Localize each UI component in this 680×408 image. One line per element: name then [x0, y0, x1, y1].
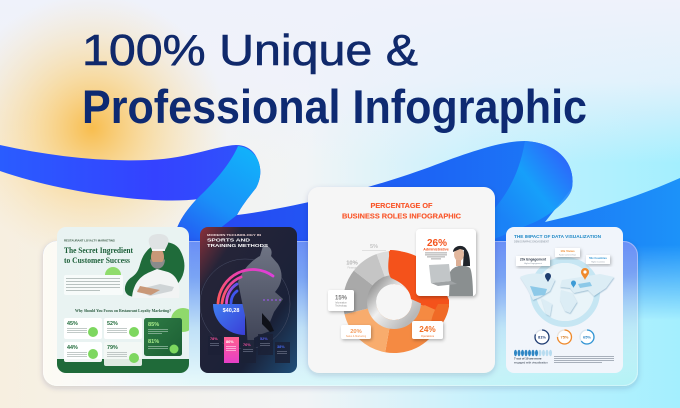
- stat: 45%: 45%: [67, 321, 78, 327]
- kicker: MODERN TECHNOLOGY IN: [207, 233, 261, 237]
- callout: engagement: [516, 256, 550, 266]
- glass panel: [43, 241, 638, 386]
- heading: [64, 246, 133, 265]
- label: 24%: 24%: [419, 325, 436, 334]
- map pin orange: [581, 268, 589, 280]
- donut: 65%: 65%: [583, 334, 591, 340]
- pie value: $40,28: [223, 308, 239, 314]
- stat card: 76%: [243, 343, 251, 347]
- label: 15%: 15%: [335, 296, 348, 302]
- people caption: engaged with visualization: [514, 360, 548, 364]
- callout: countries: 50x Countries: [589, 256, 607, 260]
- stat: 52%: [104, 318, 142, 339]
- title line 1: 100% Unique &: [82, 26, 418, 75]
- callout: views: [555, 248, 580, 257]
- stat card: 52%: [260, 337, 268, 341]
- heading: to Customer Success: [64, 256, 130, 265]
- label: 24%: Operations: [421, 334, 435, 338]
- callout: engagement: Higher Engagement: [524, 262, 542, 265]
- heading: PERCENTAGE OF: [370, 201, 433, 210]
- people icon row: [514, 350, 552, 356]
- athlete shoe: [262, 313, 274, 332]
- stat: 79%: 79%: [107, 345, 118, 351]
- callout: countries: Higher Countries: [591, 260, 605, 264]
- chef blob: [125, 242, 184, 298]
- stat: 52%: 52%: [107, 321, 118, 327]
- donut: 65%: [580, 330, 594, 344]
- outer circle line: [200, 259, 290, 349]
- donut: 75%: 75%: [560, 334, 569, 340]
- label: 15%: Information: [335, 302, 347, 304]
- label: 10%: Finance: [348, 266, 357, 270]
- light green circle: [105, 267, 121, 275]
- map pin navy: [545, 273, 551, 282]
- green circle accent: [171, 308, 189, 332]
- heading: SPORTS AND: [207, 238, 250, 242]
- label: 20%: [341, 325, 371, 339]
- callout: 26% administrative: [416, 229, 476, 296]
- raised orange slice: [388, 250, 449, 311]
- stat: 44%: 44%: [67, 345, 78, 351]
- quarter pie: [213, 304, 245, 335]
- callout: 26% administrative: 26%: [427, 238, 447, 249]
- subheading: Why Should You Focus on Restaurant Loyalty Marketing?: [75, 308, 171, 313]
- stat: 85% and 81% dark panel: 85%: [148, 322, 159, 328]
- label: 20%: 20%: [350, 329, 362, 335]
- label: 10%: 10%: [346, 260, 358, 266]
- purple dots: [263, 299, 281, 301]
- donut: 81%: [535, 330, 549, 344]
- label: 5%: [362, 244, 386, 251]
- subheading: DEMOGRAPHIC ENGAGEMENT: [514, 240, 549, 244]
- callout: 26% administrative: Administrative: [423, 248, 449, 252]
- stat card: 78%: [210, 337, 218, 341]
- intro text box: [64, 275, 123, 295]
- athlete figure: [238, 246, 283, 340]
- world map: [520, 260, 614, 324]
- heading: [207, 238, 268, 248]
- panel: restaurant loyalty infographic: [57, 227, 195, 373]
- donut: 75%: [558, 330, 572, 344]
- inner shaded ring: [372, 280, 416, 324]
- people caption: [514, 356, 548, 364]
- heading: The Secret Ingredient: [64, 246, 133, 255]
- stat: 44%: [64, 342, 102, 362]
- callout: views: 10x Views: [560, 249, 575, 253]
- people caption: 7 out of 10 are more: [514, 356, 542, 360]
- heading: [342, 201, 462, 220]
- label: 10%: [346, 260, 358, 270]
- highlighted stat card: 86%: [226, 340, 234, 344]
- stat: 85% and 81% dark panel: [144, 318, 182, 356]
- stat: 85% and 81% dark panel: 81%: [148, 339, 159, 345]
- donut: 81%: 81%: [538, 334, 546, 340]
- label: 15%: [328, 290, 354, 311]
- panel: data visualization infographic: [506, 227, 623, 373]
- label: 20%: Sales & Marketing: [346, 335, 367, 338]
- bottom green band: [57, 359, 189, 373]
- callout: countries: [586, 255, 610, 264]
- map pin blue: [571, 280, 576, 288]
- businesswoman with laptop: [429, 246, 473, 296]
- label: 5%: 5%: [370, 244, 378, 250]
- callout: views: Faster Content Views: [559, 254, 576, 256]
- callout: engagement: 20x Engagement: [520, 258, 547, 262]
- blue ribbon wave: [0, 141, 680, 335]
- panel: business roles infographic: [308, 187, 495, 373]
- kicker text: RESTAURANT LOYALTY MARKETING: [64, 238, 116, 242]
- label: 24%: [412, 321, 443, 339]
- stat: 79%: [104, 342, 142, 366]
- title line 2: Professional Infographic: [82, 80, 587, 133]
- chef illustration: [132, 234, 179, 298]
- heading: THE IMPACT OF DATA VISUALIZATION: [514, 234, 602, 239]
- heading: TRAINING METHODS: [207, 243, 268, 248]
- activity arcs: [218, 269, 273, 303]
- stat: 45%: [64, 318, 102, 339]
- label: 15%: Technology: [335, 306, 348, 308]
- panel: sports and training infographic: [200, 227, 297, 373]
- heading: BUSINESS ROLES INFOGRAPHIC: [342, 212, 462, 220]
- body text lines: [554, 356, 614, 363]
- stat card: 38%: [277, 345, 285, 349]
- donut chart: [356, 250, 449, 340]
